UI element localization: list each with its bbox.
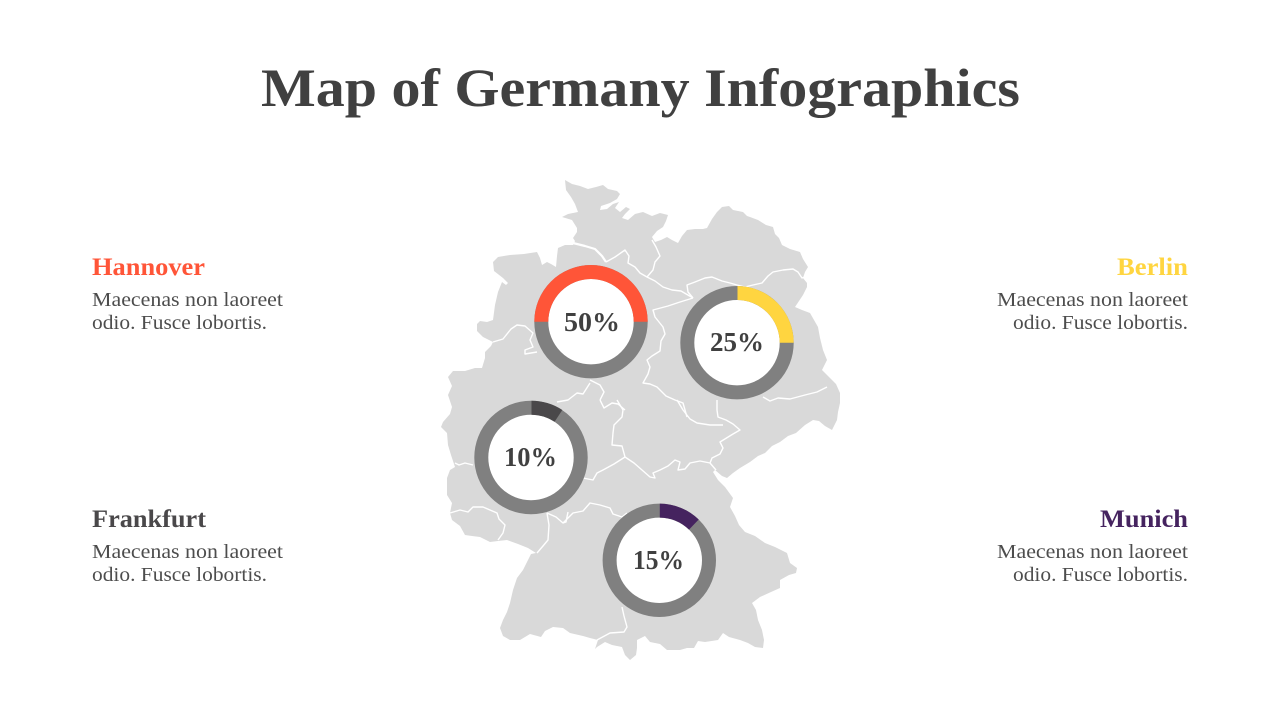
text block: Frankfurt: Frankfurt	[92, 506, 207, 533]
text block: Munich	[997, 506, 1188, 586]
donut: Berlin 25%	[687, 286, 794, 392]
text block: Hannover: Maecenas non laoreet	[92, 289, 283, 311]
text block: Berlin: Berlin	[1117, 254, 1188, 281]
donut: Frankfurt 10%	[481, 401, 581, 507]
text block: Frankfurt	[92, 506, 283, 586]
map of Germany	[441, 180, 840, 660]
text block: Hannover	[92, 254, 283, 334]
text block: Munich: Maecenas non laoreet	[997, 541, 1188, 563]
donut: Hannover 50%: 50%	[564, 307, 620, 337]
donut: Frankfurt 10%: 10%	[504, 442, 557, 472]
donut: Munich 15%	[610, 504, 709, 610]
text block: Munich: odio. Fusce lobortis.	[1013, 564, 1188, 586]
text block: Munich: Munich	[1100, 506, 1188, 533]
text block: Frankfurt: Maecenas non laoreet	[92, 541, 283, 563]
donut: Hannover 50%	[534, 265, 648, 371]
text block: Hannover: odio. Fusce lobortis.	[92, 312, 267, 334]
text block: Berlin: odio. Fusce lobortis.	[1013, 312, 1188, 334]
text block: Berlin: Maecenas non laoreet	[997, 289, 1188, 311]
donut: Berlin 25%: 25%	[710, 327, 764, 357]
text block: Frankfurt: odio. Fusce lobortis.	[92, 564, 267, 586]
text block: Hannover: Hannover	[92, 254, 205, 281]
text block: Berlin	[997, 254, 1188, 334]
title: Map of Germany Infographics	[261, 58, 1020, 118]
donut: Munich 15%: 15%	[633, 545, 684, 575]
